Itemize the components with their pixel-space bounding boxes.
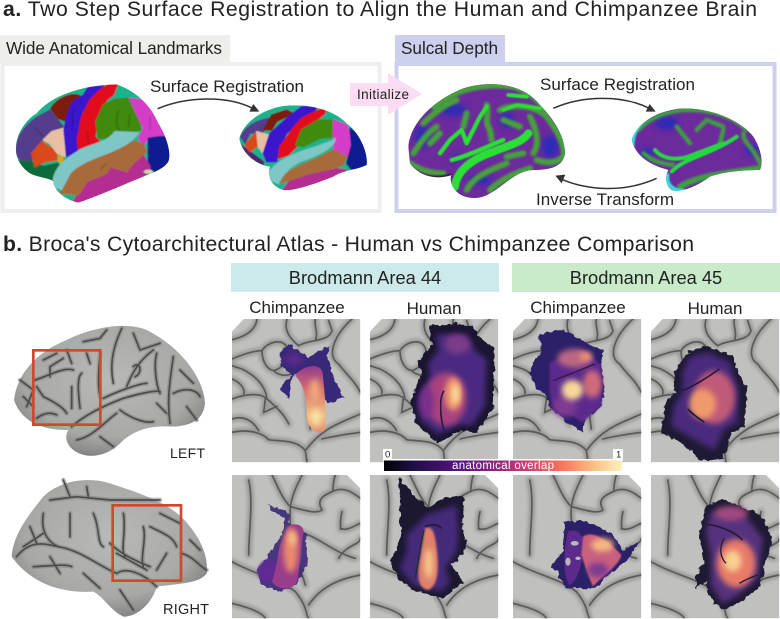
arrow: surface registration forward <box>553 98 656 112</box>
panel heading: sulcal depth <box>395 35 505 64</box>
heatmap: human area 44 right <box>370 475 498 618</box>
heatmap: chimpanzee area 44 left <box>232 319 360 462</box>
label: surface registration: Surface Registration <box>150 77 304 96</box>
icon: parcellated chimpanzee brain <box>237 103 370 193</box>
column label: chimpanzee 45: Chimpanzee <box>530 298 626 317</box>
legend: anatomical overlap colorbar: 1 <box>616 450 621 460</box>
label: right: RIGHT <box>163 602 209 618</box>
column label: human 44: Human <box>407 299 461 318</box>
panel heading: wide anatomical landmarks: Wide Anatomical Landmarks <box>6 38 222 58</box>
heatmap: human area 45 right <box>651 475 779 618</box>
heading: Brodmann Area 45 <box>512 263 780 292</box>
icon: sulcal depth chimpanzee brain <box>632 108 762 191</box>
icon: sulcal depth human brain <box>408 84 565 198</box>
heatmap: chimpanzee area 45 right <box>513 475 641 618</box>
legend: anatomical overlap colorbar <box>383 449 623 472</box>
heading: Brodmann Area 44 <box>231 263 499 292</box>
panel: wide anatomical landmarks <box>0 35 380 211</box>
arrow: inverse transform <box>555 175 657 188</box>
heatmap: human area 45 left <box>651 319 779 462</box>
heading: Brodmann Area 44: Brodmann Area 44 <box>289 267 441 288</box>
column label: human 45: Human <box>688 299 742 318</box>
label: inverse transform: Inverse Transform <box>536 190 674 209</box>
arrow: surface registration <box>158 99 259 112</box>
arrow: initialize: Initialize <box>357 87 409 102</box>
heatmap: human area 44 left <box>370 319 498 462</box>
icon: left hemisphere brain with red box <box>14 326 205 456</box>
column label: chimpanzee 44: Chimpanzee <box>249 298 345 317</box>
panel heading: sulcal depth: Sulcal Depth <box>401 38 498 58</box>
panel heading: wide anatomical landmarks <box>0 35 230 64</box>
arrow: initialize <box>350 73 422 115</box>
legend: anatomical overlap colorbar: 0 <box>385 450 390 460</box>
icon: parcellated human brain <box>13 82 173 207</box>
panel: sulcal depth <box>395 35 774 211</box>
icon: right hemisphere brain with red box <box>12 480 207 617</box>
legend: anatomical overlap colorbar: anatomical overlap <box>452 460 554 472</box>
label: surface registration: Surface Registration <box>540 75 695 94</box>
heatmap: chimpanzee area 45 left <box>513 319 641 462</box>
heatmap: chimpanzee area 44 right <box>232 475 360 618</box>
label: left: LEFT <box>170 445 205 461</box>
heading: Brodmann Area 45: Brodmann Area 45 <box>570 267 722 288</box>
title: section b: b. Broca's Cytoarchitectural Atlas - Human vs Chimpanzee Comparison <box>3 233 694 256</box>
